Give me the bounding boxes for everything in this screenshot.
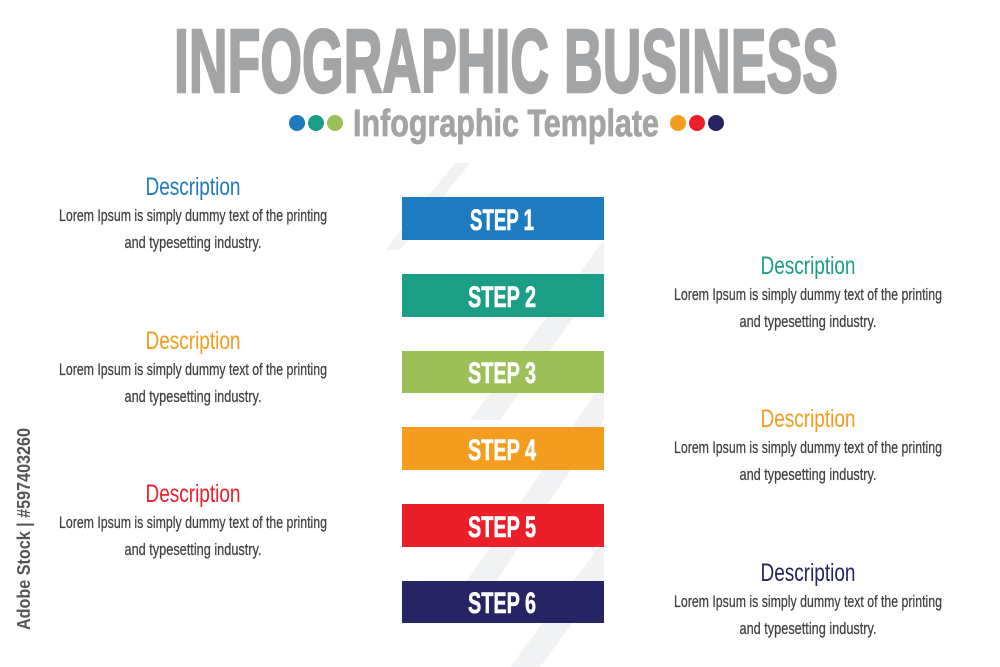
right desc 1: and typesetting industry. bbox=[740, 312, 876, 331]
step 1 bbox=[402, 197, 604, 240]
step 5 bbox=[402, 504, 604, 547]
subtitle: Infographic Template bbox=[353, 103, 659, 145]
left desc 3: and typesetting industry. bbox=[124, 540, 262, 559]
left desc 2: Description bbox=[146, 327, 240, 355]
right desc 1 bbox=[674, 252, 942, 331]
step 4: STEP 4 bbox=[468, 434, 536, 467]
right desc 1: Description bbox=[760, 252, 856, 280]
step 6: STEP 6 bbox=[468, 587, 536, 620]
step 3 bbox=[402, 351, 604, 393]
left desc 3 bbox=[59, 480, 327, 559]
left desc 1: Description bbox=[146, 173, 240, 201]
left desc 1: and typesetting industry. bbox=[124, 233, 262, 252]
step 6 bbox=[402, 581, 604, 623]
step 5: STEP 5 bbox=[468, 511, 536, 544]
right desc 2: and typesetting industry. bbox=[740, 465, 876, 484]
left desc 2: and typesetting industry. bbox=[124, 387, 262, 406]
left desc 2 bbox=[59, 327, 327, 406]
left desc 3: Lorem Ipsum is simply dummy text of the printing bbox=[59, 513, 327, 532]
right desc 3: Description bbox=[760, 559, 856, 587]
step 2 bbox=[402, 274, 604, 317]
steps column bbox=[402, 197, 604, 623]
step 3: STEP 3 bbox=[468, 357, 536, 390]
step 4 bbox=[402, 427, 604, 470]
right desc 3: and typesetting industry. bbox=[740, 619, 876, 638]
vertical watermark: Adobe Stock | #597403260 bbox=[14, 428, 34, 630]
description blocks bbox=[59, 173, 942, 638]
step 1: STEP 1 bbox=[470, 204, 534, 237]
right desc 2: Description bbox=[760, 405, 856, 433]
left desc 1 bbox=[59, 173, 327, 252]
step 2: STEP 2 bbox=[468, 281, 536, 314]
right desc 3 bbox=[674, 559, 942, 638]
left desc 3: Description bbox=[146, 480, 240, 508]
right desc 2 bbox=[674, 405, 942, 484]
left desc 1: Lorem Ipsum is simply dummy text of the printing bbox=[59, 206, 327, 225]
left desc 2: Lorem Ipsum is simply dummy text of the printing bbox=[59, 360, 327, 379]
decorative dots left bbox=[289, 115, 343, 131]
